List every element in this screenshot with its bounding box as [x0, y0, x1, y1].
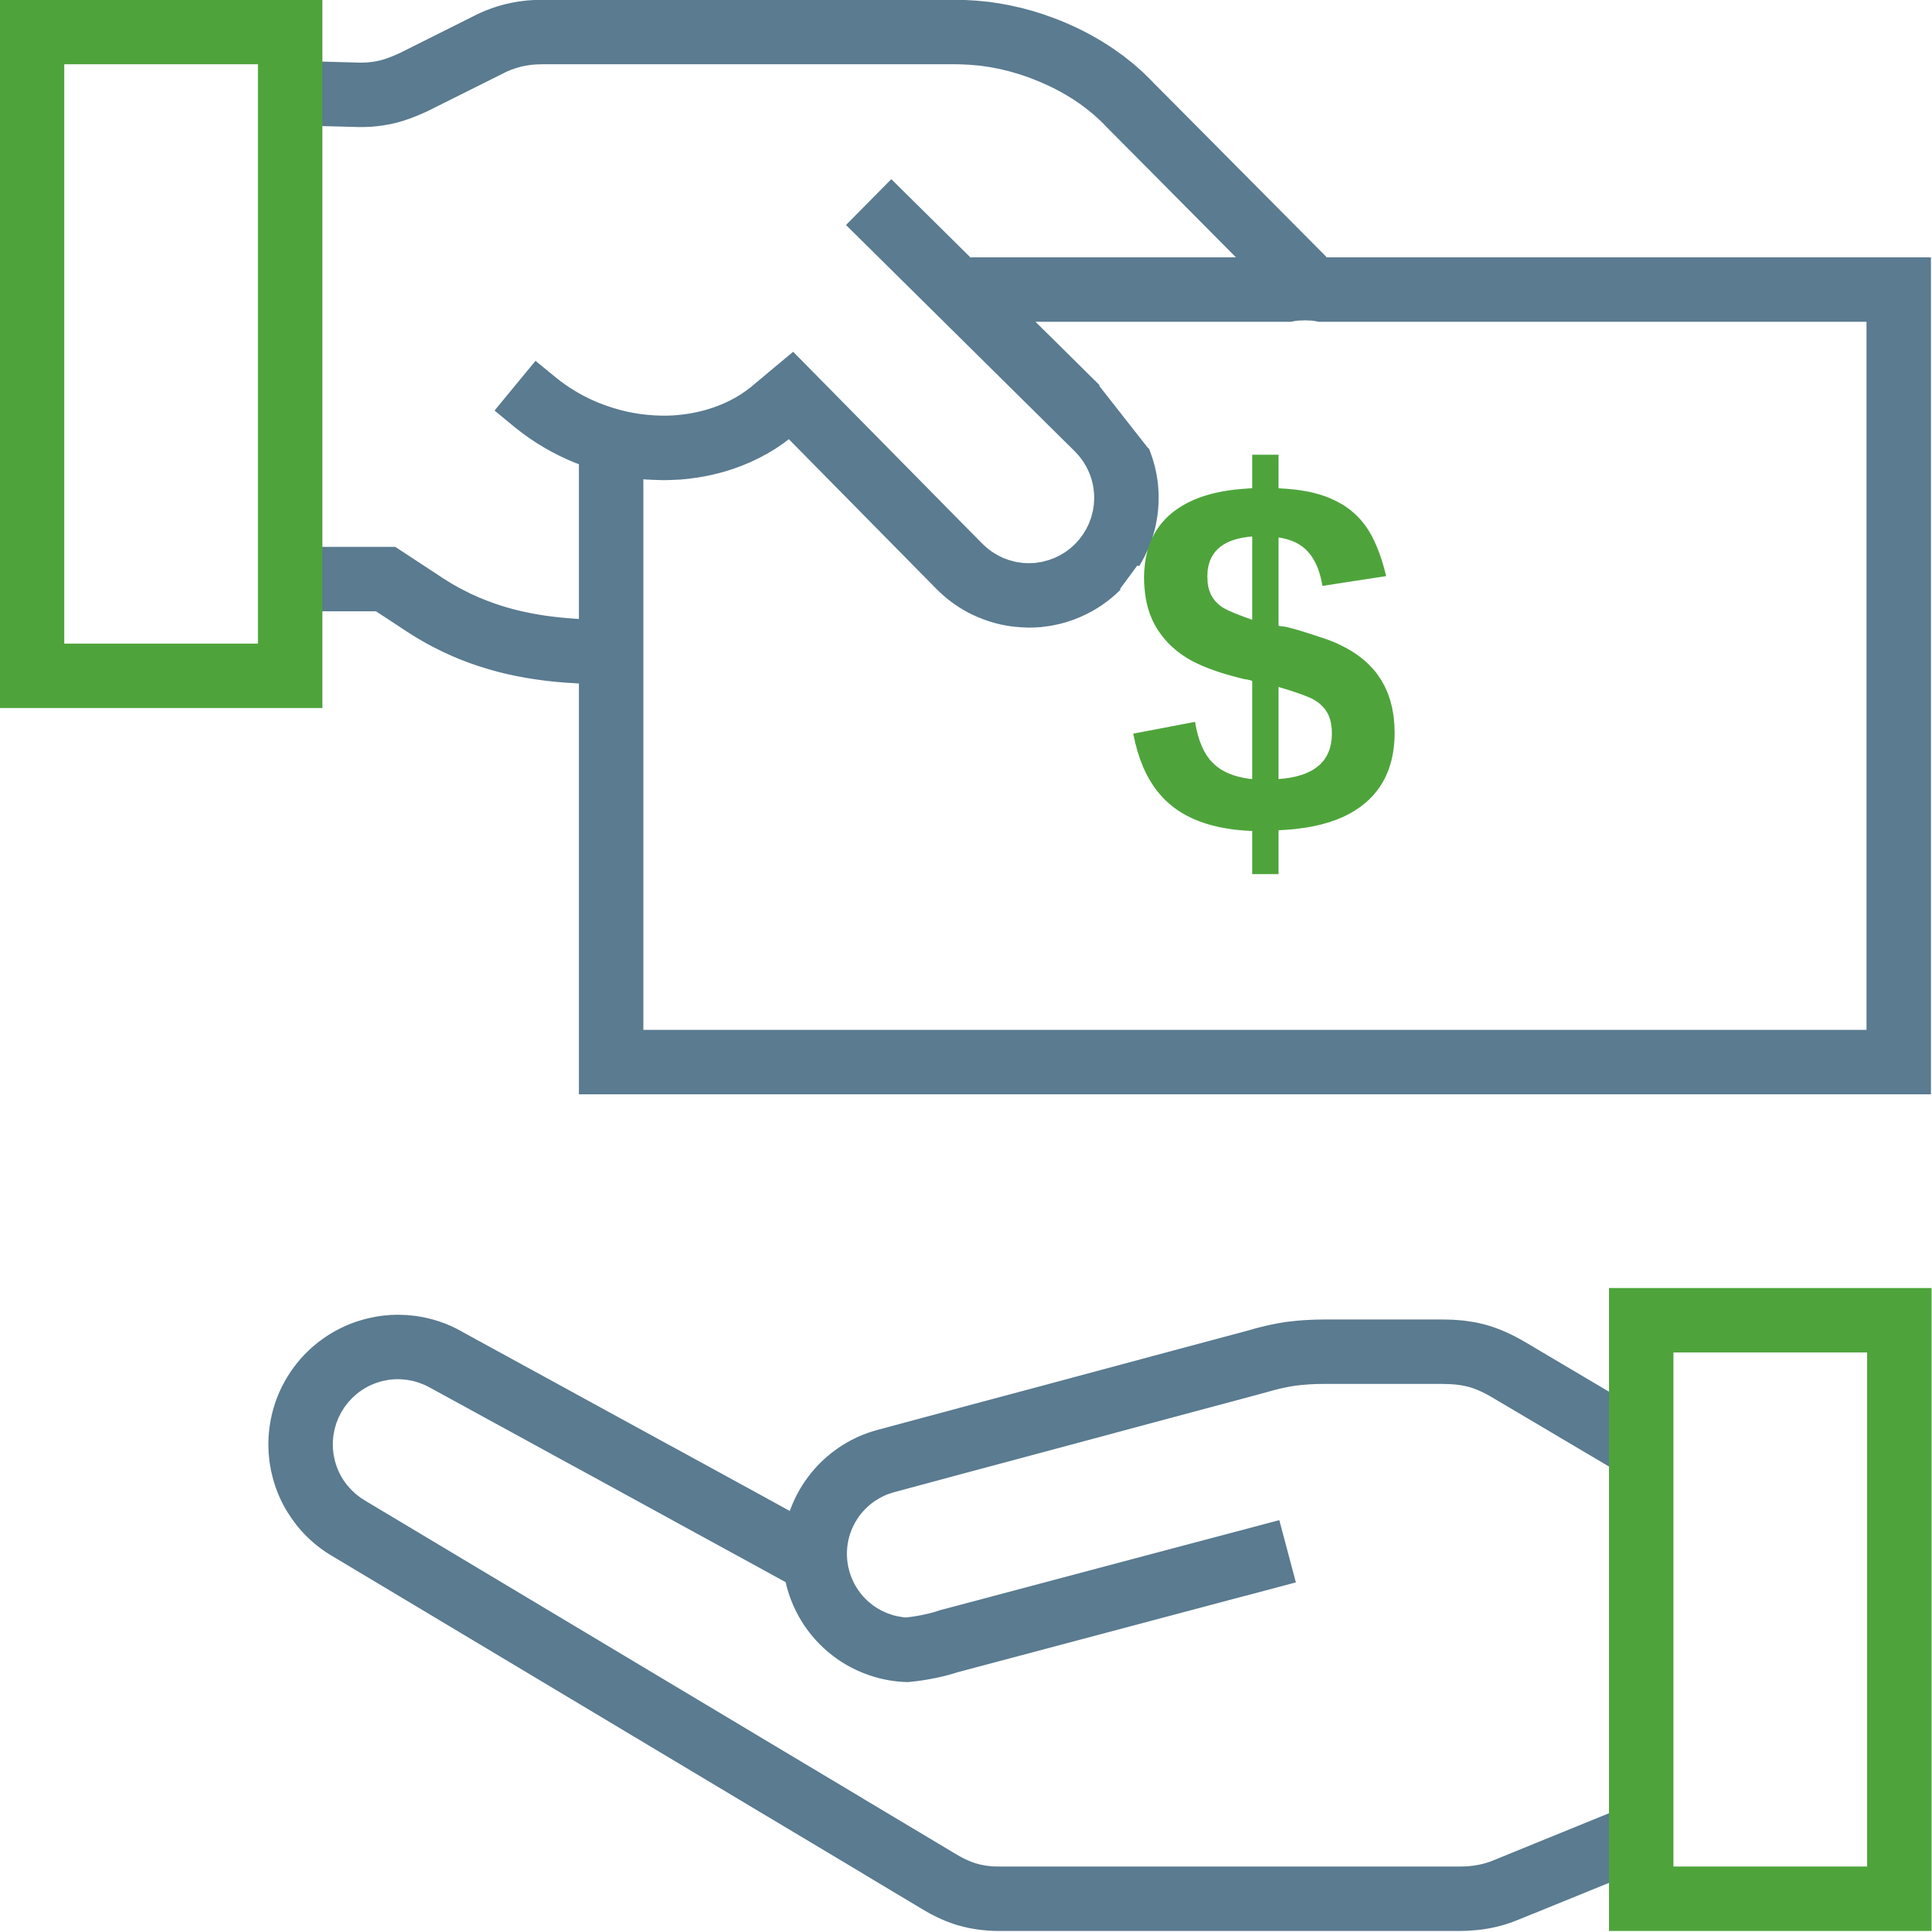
icon: upper hand green cuff — [32, 32, 290, 676]
icon: lower hand green cuff — [1641, 1320, 1900, 1899]
icon: upper hand back of hand — [314, 32, 1320, 325]
icon: lower hand palm — [300, 1347, 1645, 1899]
icon: lower hand fingers and thumb — [815, 1352, 1657, 1650]
panel: banknote outline — [611, 290, 1899, 1062]
text: dollar sign: $ — [1127, 371, 1401, 945]
icon: upper hand finger gripping the note — [515, 202, 1189, 622]
icon: upper hand wrist lower edge — [314, 579, 604, 652]
